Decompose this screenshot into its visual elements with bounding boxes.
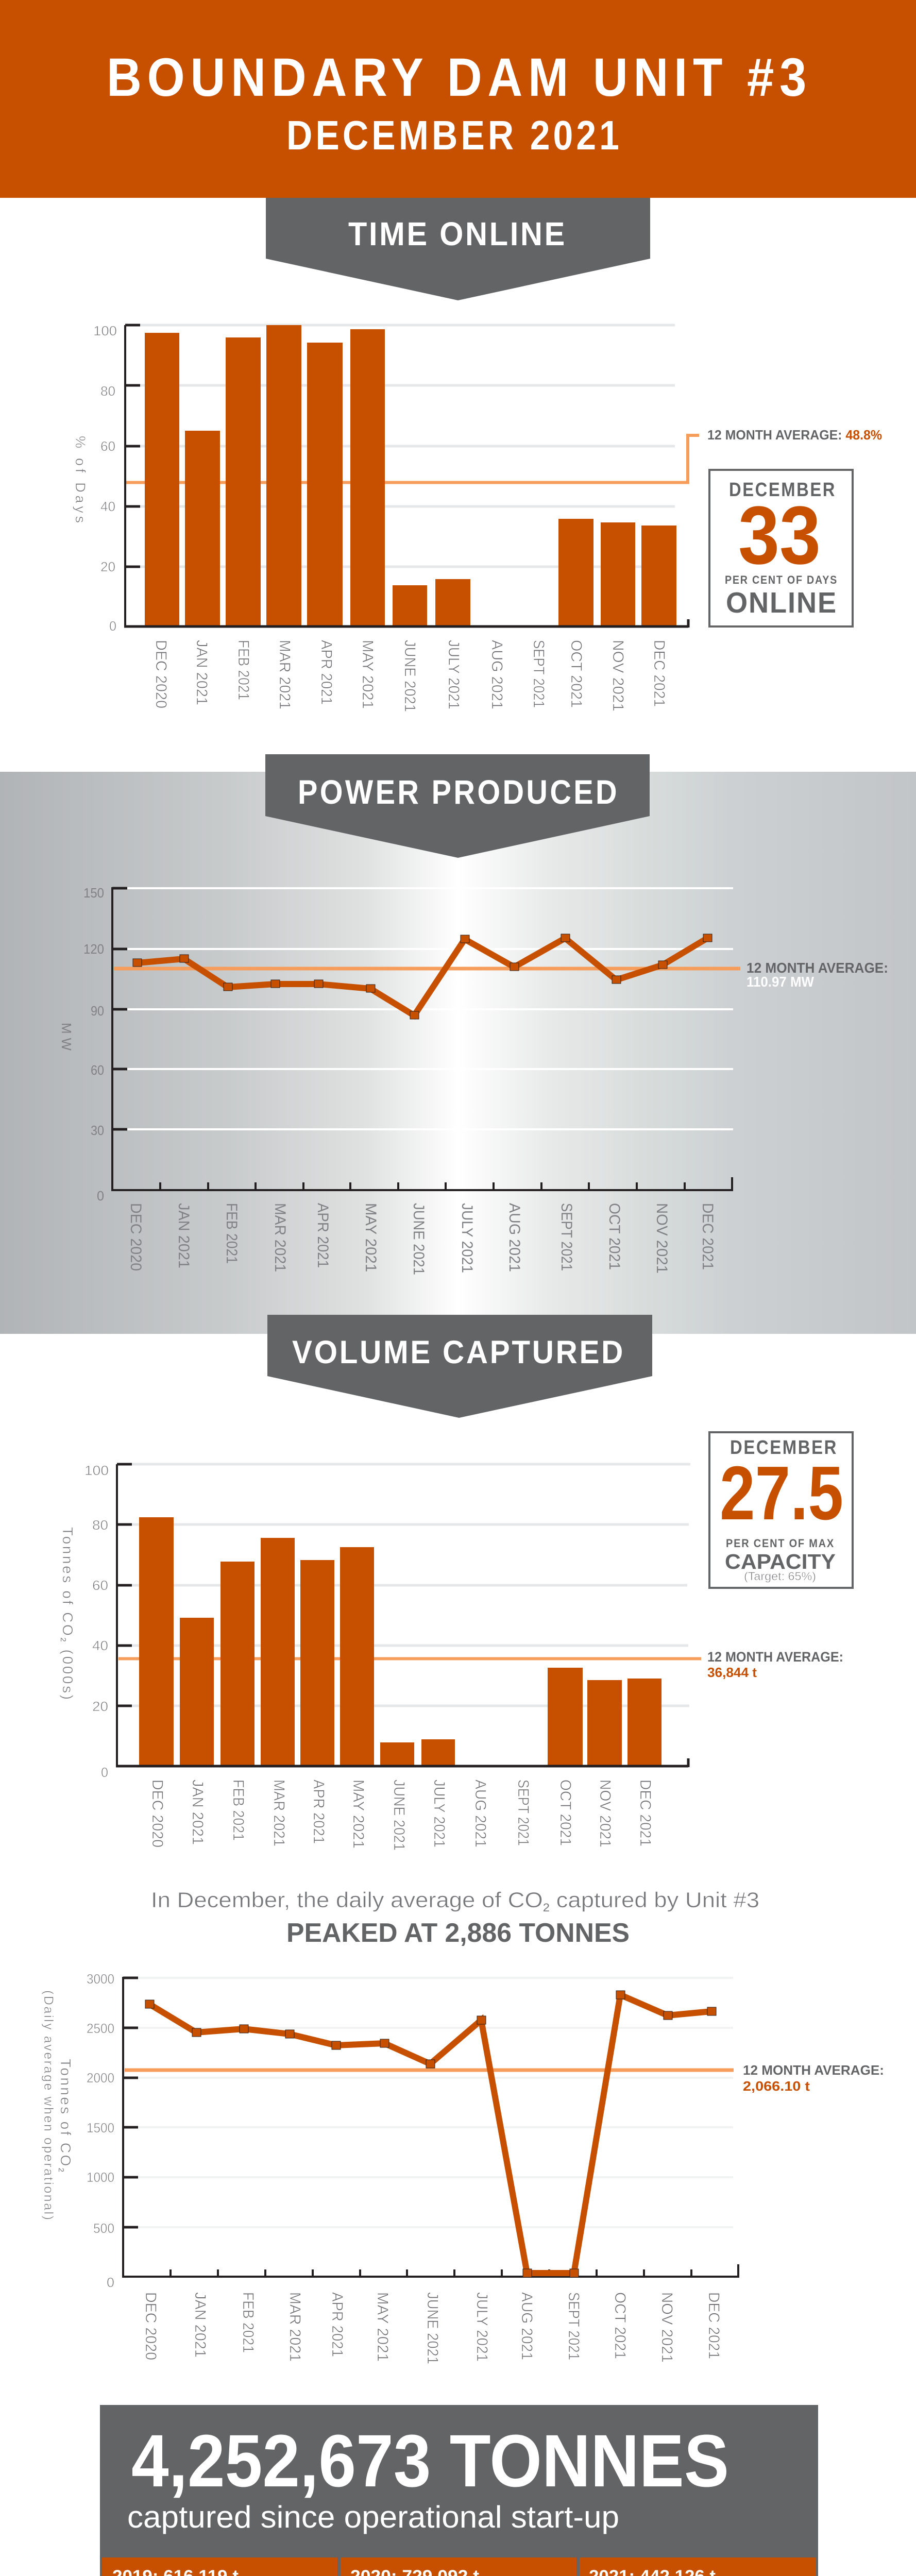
- x axis labels: JULY 2021: [473, 2292, 490, 2362]
- callout: december 33 per cent online: ONLINE: [726, 586, 837, 619]
- y axis labels: [84, 1463, 109, 1780]
- x axis labels: DEC 2021: [699, 1203, 716, 1270]
- x axis labels: FEB 2021: [235, 640, 252, 700]
- x axis labels: FEB 2021: [223, 1203, 240, 1264]
- axes: [124, 325, 688, 628]
- x axis labels: JUNE 2021: [410, 1203, 427, 1275]
- x axis labels: JAN 2021: [192, 2292, 209, 2358]
- section heading: power produced: [265, 754, 650, 858]
- y axis labels: 100: [93, 323, 117, 338]
- x axis labels: NOV 2021: [653, 1203, 670, 1274]
- x axis labels: DEC 2020: [142, 2292, 159, 2360]
- text block: daily average statement: [151, 1888, 759, 1948]
- x axis labels: SEPT 2021: [565, 2292, 582, 2360]
- y axis labels: 30: [91, 1123, 104, 1138]
- y axis title: 2: [59, 1637, 67, 1642]
- x axis labels: MAR 2021: [286, 2292, 303, 2362]
- gradient band: power produced background: [0, 772, 916, 1334]
- panel: power produced chart: [59, 885, 888, 1275]
- y axis title: (Daily average when operational): [41, 1990, 56, 2220]
- y axis labels: 80: [92, 1517, 108, 1533]
- y axis labels: 0: [109, 618, 116, 634]
- section heading: volume captured: VOLUME CAPTURED: [292, 1334, 625, 1370]
- y axis title: % of Days: [73, 436, 88, 523]
- y axis title: Tonnes of CO: [60, 1527, 76, 1636]
- y axis labels: 0: [101, 1765, 108, 1780]
- callout: december 27.5 per cent of capacity: [709, 1432, 853, 1588]
- y axis labels: [93, 323, 117, 634]
- bar chart: tonnes captured: [139, 1517, 661, 1766]
- y axis title: MW: [59, 1023, 74, 1050]
- line chart: daily tonnes: [145, 1991, 716, 2277]
- axes: [111, 887, 733, 1190]
- section heading: time online: [266, 198, 650, 300]
- callout: december 27.5 per cent of capacity: PER CENT OF MAX: [726, 1537, 835, 1550]
- text block: daily average statement: captured by Unit #3: [550, 1888, 759, 1912]
- y axis labels: 1000: [87, 2170, 114, 2185]
- y axis labels: [87, 1971, 114, 2290]
- x axis labels: MAY 2021: [374, 2292, 391, 2362]
- y axis title: (000s): [60, 1643, 76, 1700]
- x axis labels: AUG 2021: [506, 1203, 523, 1272]
- x axis labels: [149, 1780, 654, 1851]
- panel: total tonnes captured: [100, 2405, 818, 2576]
- x axis labels: AUG 2021: [472, 1780, 489, 1848]
- x axis labels: APR 2021: [310, 1780, 327, 1844]
- x axis labels: APR 2021: [318, 640, 335, 705]
- callout: december 33 per cent online: 33: [738, 489, 821, 581]
- callout: december 33 per cent online: PER CENT OF DAYS: [725, 573, 838, 586]
- x axis labels: AUG 2021: [518, 2292, 535, 2360]
- line chart: megawatts: [133, 934, 712, 1019]
- callout: december 33 per cent online: [709, 470, 853, 626]
- average label: 12 MONTH AVERAGE: 48.8%: [707, 427, 882, 443]
- x axis labels: OCT 2021: [557, 1780, 574, 1846]
- panel: daily average chart: [41, 1971, 884, 2364]
- x axis labels: MAY 2021: [350, 1780, 367, 1849]
- x axis labels: OCT 2021: [612, 2292, 629, 2359]
- axes: [122, 1977, 739, 2277]
- callout: december 33 per cent online: DECEMBER: [729, 479, 836, 501]
- x axis labels: [152, 640, 668, 712]
- y axis title: 2: [57, 2168, 65, 2172]
- x axis labels: JULY 2021: [459, 1203, 476, 1273]
- average label: 2,066.10 t: [743, 2078, 810, 2094]
- yearly cell: 2021: [580, 2557, 816, 2576]
- y axis labels: 100: [84, 1463, 109, 1478]
- average label: [743, 2062, 884, 2094]
- x axis labels: NOV 2021: [597, 1780, 614, 1848]
- y axis labels: 120: [83, 941, 104, 957]
- x axis labels: DEC 2021: [705, 2292, 722, 2359]
- total figure: 4,252,673 TONNES: [131, 2419, 729, 2502]
- axes: [116, 1464, 688, 1767]
- callout: december 27.5 per cent of capacity: CAPACITY: [725, 1550, 836, 1573]
- y axis title: Tonnes of CO: [58, 2059, 74, 2166]
- x axis labels: FEB 2021: [230, 1780, 247, 1841]
- x axis labels: JULY 2021: [445, 640, 462, 709]
- x axis labels: MAY 2021: [359, 640, 376, 709]
- header band: [0, 0, 916, 198]
- x axis labels: FEB 2021: [240, 2292, 257, 2353]
- x axis labels: AUG 2021: [488, 640, 505, 709]
- x axis labels: NOV 2021: [609, 640, 626, 711]
- x axis labels: [142, 2292, 722, 2364]
- x axis labels: MAR 2021: [276, 640, 293, 709]
- y axis labels: 150: [83, 885, 104, 901]
- x axis labels: MAR 2021: [272, 1203, 289, 1272]
- x axis labels: DEC 2020: [149, 1780, 166, 1848]
- text block: daily average statement: 2: [543, 1901, 550, 1914]
- x axis labels: JUNE 2021: [424, 2292, 441, 2364]
- callout: december 27.5 per cent of capacity: 27.5: [720, 1451, 843, 1536]
- section heading: time online: TIME ONLINE: [348, 215, 567, 252]
- x axis labels: DEC 2021: [637, 1780, 654, 1846]
- x axis labels: JUNE 2021: [401, 640, 418, 712]
- x axis labels: JULY 2021: [431, 1780, 448, 1848]
- y axis labels: 60: [91, 1062, 104, 1078]
- y axis labels: 3000: [87, 1971, 114, 1987]
- section heading: volume captured: [267, 1315, 652, 1418]
- average line: [118, 1657, 701, 1660]
- callout: december 27.5 per cent of capacity: DECEMBER: [730, 1437, 838, 1459]
- y axis labels: 20: [92, 1699, 108, 1714]
- x axis labels: JAN 2021: [193, 640, 210, 705]
- x axis labels: JAN 2021: [189, 1780, 206, 1845]
- y axis labels: 20: [100, 559, 115, 574]
- yearly cell: 2019: [102, 2557, 337, 2576]
- panel: time online chart: [73, 323, 882, 712]
- average line with leader: [126, 435, 699, 482]
- average label: 12 MONTH AVERAGE:: [743, 2062, 884, 2078]
- section heading: power produced: POWER PRODUCED: [298, 773, 619, 811]
- y axis labels: 2000: [87, 2070, 114, 2086]
- average label: 36,844 t: [707, 1665, 757, 1680]
- y axis labels: 80: [100, 383, 115, 399]
- average label: 12 MONTH AVERAGE:: [747, 960, 888, 976]
- x axis labels: SEPT 2021: [515, 1780, 532, 1846]
- x axis labels: JUNE 2021: [391, 1780, 408, 1851]
- y axis labels: 500: [93, 2221, 114, 2236]
- x axis labels: [127, 1203, 716, 1275]
- average label: 110.97 MW: [747, 974, 815, 990]
- y axis labels: 40: [100, 499, 115, 514]
- x axis labels: MAR 2021: [270, 1780, 287, 1846]
- x axis labels: APR 2021: [329, 2292, 346, 2357]
- title: BOUNDARY DAM UNIT #3: [107, 47, 812, 108]
- x axis labels: OCT 2021: [568, 640, 585, 708]
- bar chart: per cent of days online: [145, 325, 676, 626]
- y axis labels: 2500: [87, 2021, 114, 2036]
- y axis labels: 0: [97, 1188, 104, 1204]
- x axis labels: DEC 2020: [152, 640, 169, 708]
- callout: december 27.5 per cent of capacity: (Target: 65%): [744, 1570, 816, 1583]
- x axis labels: NOV 2021: [658, 2292, 675, 2363]
- x axis labels: JAN 2021: [175, 1203, 192, 1268]
- total caption: captured since operational start-up: [127, 2500, 619, 2534]
- y axis labels: 1500: [87, 2120, 114, 2136]
- y axis labels: [83, 885, 104, 1204]
- x axis labels: DEC 2020: [127, 1203, 144, 1271]
- y axis labels: 60: [92, 1578, 108, 1593]
- panel: volume captured chart: [59, 1432, 853, 1851]
- y axis title: [41, 1990, 74, 2220]
- average label: [707, 1649, 843, 1680]
- average label: 12 MONTH AVERAGE:: [707, 1649, 843, 1665]
- average line: [114, 967, 740, 971]
- x axis labels: DEC 2021: [651, 640, 668, 707]
- subtitle: DECEMBER 2021: [286, 112, 622, 158]
- peak heading: PEAKED AT 2,886 TONNES: [286, 1918, 630, 1948]
- average label: [747, 960, 888, 990]
- x axis labels: SEPT 2021: [530, 640, 547, 708]
- y axis labels: 40: [92, 1638, 108, 1653]
- average line: [125, 2068, 734, 2072]
- y axis labels: 90: [91, 1003, 104, 1019]
- x axis labels: APR 2021: [314, 1203, 331, 1268]
- x axis labels: MAY 2021: [362, 1203, 379, 1272]
- yearly cell: 2020: [341, 2557, 576, 2576]
- x axis labels: OCT 2021: [606, 1203, 623, 1270]
- x axis labels: SEPT 2021: [558, 1203, 575, 1271]
- y axis labels: 0: [107, 2275, 114, 2290]
- y axis labels: 60: [100, 438, 115, 454]
- text block: daily average statement: In December, the daily average of CO: [151, 1888, 513, 1912]
